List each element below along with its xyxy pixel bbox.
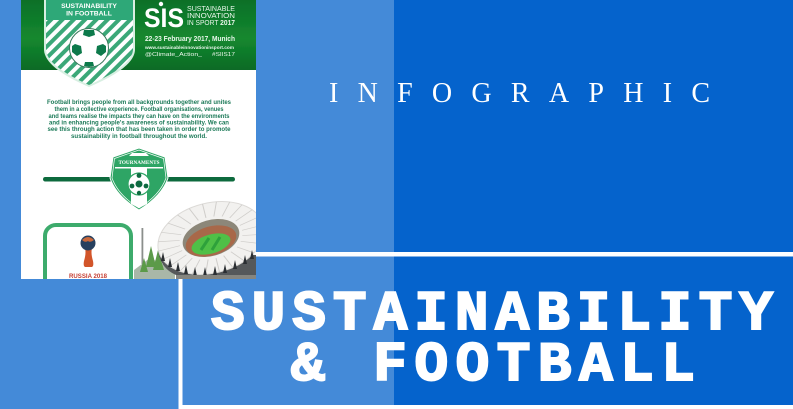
- intro paragraph: sustainability in football throughout the world.: [71, 133, 207, 140]
- icon: football: [70, 28, 108, 68]
- event details: #SIIS17: [212, 52, 235, 58]
- intro paragraph: see this through action that has been taken in order to promote: [48, 126, 231, 133]
- title second line: & FOOTBALL: [291, 333, 695, 397]
- logo: SIS: SIS: [144, 3, 184, 33]
- event details: www.sustainableinnovationinsport.com: [144, 45, 234, 50]
- card label: RUSSIA 2018: [69, 274, 108, 280]
- card: Russia 2018: [43, 223, 133, 279]
- logo wordmark: IN SPORT 2017: [187, 20, 235, 27]
- intro paragraph: them in a collective experience. Football organisations, venues: [54, 106, 224, 113]
- intro paragraph: and in enhancing people's awareness of sustainability. We can: [49, 120, 229, 126]
- divider line: [43, 177, 235, 182]
- event details: @Climate_Action_: [145, 52, 203, 58]
- icon: tournaments badge: [110, 148, 168, 210]
- icon: sustainability in football shield: IN FOOTBALL: [66, 10, 112, 18]
- panel: poster preview: [21, 0, 256, 279]
- heading: infographic: INFOGRAPHIC: [329, 78, 710, 109]
- background: dark blue right half: [394, 0, 793, 409]
- intro paragraph: and teams realise the impacts they can have on the environments: [48, 113, 230, 120]
- logo wordmark: SUSTAINABLE: [187, 6, 235, 13]
- badge label: TOURNAMENTS: [118, 160, 160, 166]
- frame lines: [178, 252, 793, 409]
- illustration: stadium: [134, 201, 256, 279]
- event details: 22-23 February 2017, Munich: [145, 34, 235, 43]
- logo wordmark: [187, 6, 235, 25]
- icon: sustainability in football shield: [44, 0, 135, 87]
- poster green header: [21, 0, 256, 70]
- intro paragraph: Football brings people from all backgrounds together and unites: [47, 99, 231, 106]
- event details: [145, 36, 235, 57]
- stadium base spikes: [161, 250, 254, 276]
- icon: world cup trophy: [80, 236, 96, 267]
- logo wordmark: INNOVATION: [187, 13, 235, 20]
- intro paragraph: [47, 99, 231, 140]
- title: [211, 282, 773, 397]
- title: SUSTAINABILITY: [211, 282, 773, 346]
- shield title: SUSTAINABILITY: [61, 3, 117, 10]
